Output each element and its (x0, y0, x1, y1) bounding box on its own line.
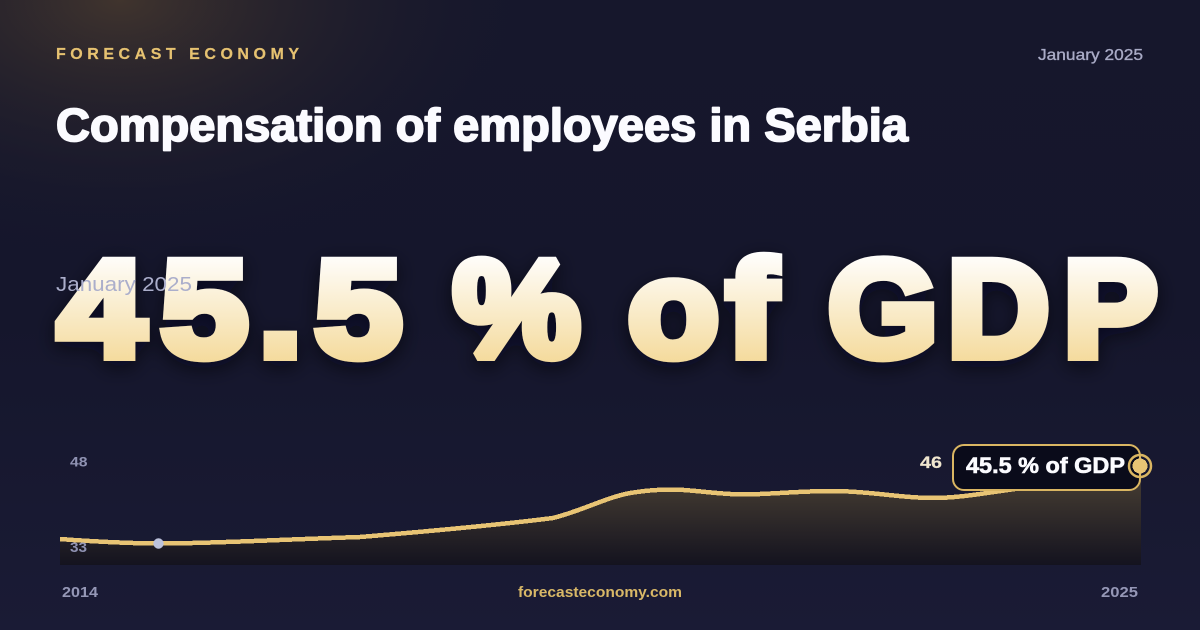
line series (60, 489, 1015, 544)
big value (58, 232, 1158, 386)
callout (953, 445, 1140, 490)
low point marker (153, 538, 164, 549)
brand label: FORECAST ECONOMY (56, 46, 299, 63)
title: Compensation of employees in Serbia (56, 99, 908, 151)
big value: 45.5 (58, 233, 402, 386)
date over value: January 2025 (56, 274, 192, 296)
source url: forecasteconomy.com (518, 584, 682, 601)
x axis end label: 2025 (1101, 584, 1138, 601)
big value: GDP (828, 233, 1158, 386)
y axis max label: 48 (70, 454, 88, 470)
y axis min label: 33 (70, 539, 87, 555)
secondary value label: 46 (920, 453, 942, 472)
big value: % (453, 232, 580, 385)
date top right: January 2025 (1038, 47, 1143, 64)
x axis start label: 2014 (62, 584, 99, 601)
big value: of (628, 233, 777, 386)
area fill (60, 480, 1141, 565)
callout: 45.5 % of GDP (966, 453, 1125, 478)
end point marker (1129, 455, 1151, 477)
area chart (60, 445, 1151, 565)
